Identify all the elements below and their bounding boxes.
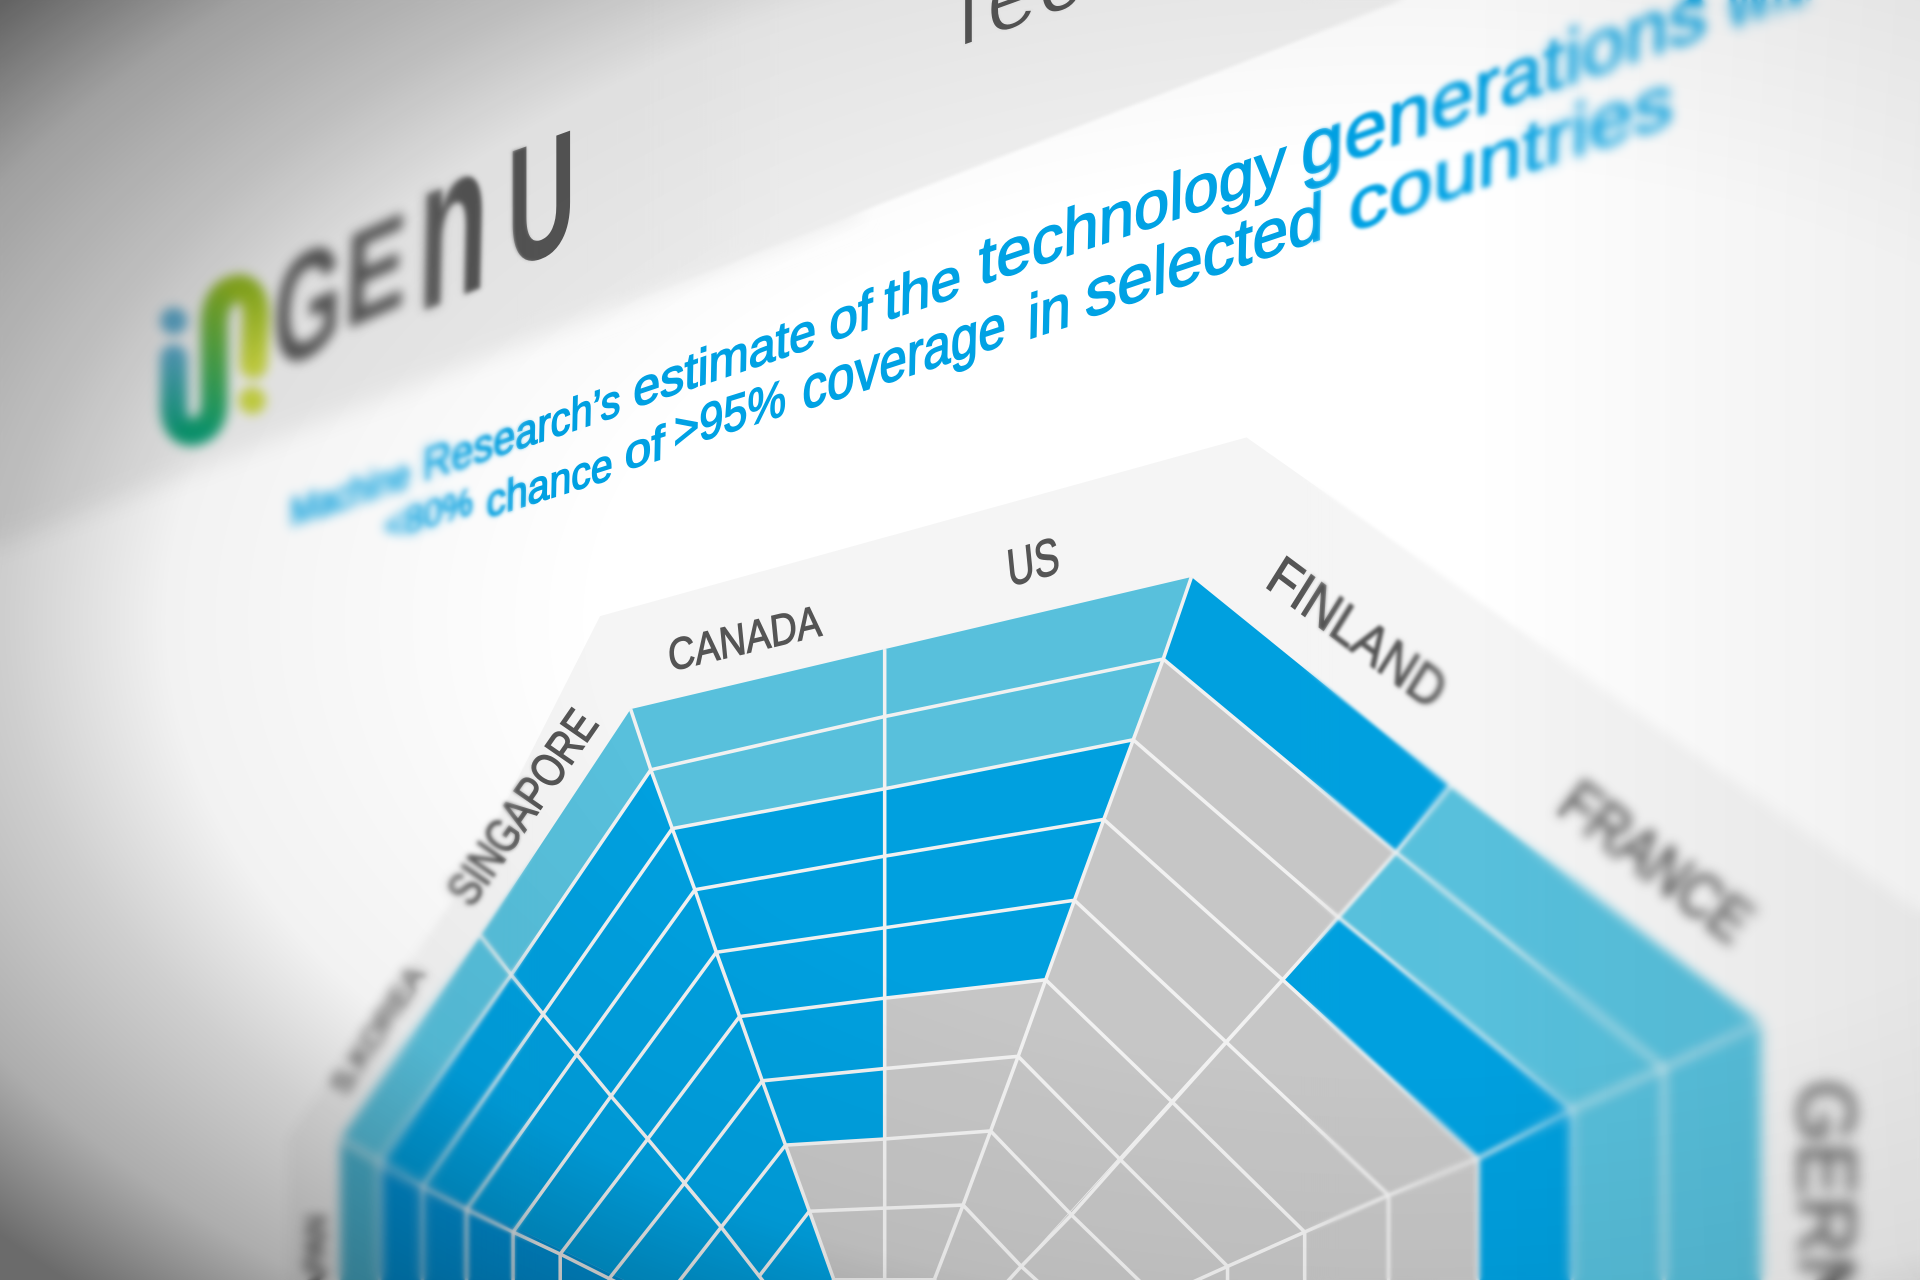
sector: Finland — [906, 577, 1450, 1280]
sector: France — [924, 786, 1761, 1280]
sector: left lower country — [340, 1139, 827, 1280]
subtitle line 1: technology — [978, 123, 1287, 300]
sector: Germany — [955, 1023, 1761, 1280]
subtitle line 2: >95% — [673, 367, 787, 461]
subtitle line 2: in — [1027, 269, 1072, 353]
subtitle line 2: chance — [486, 438, 613, 528]
subtitle line 2 — [384, 57, 1674, 549]
sector: Singapore — [481, 709, 860, 1280]
subtitle line 1: the — [884, 244, 962, 334]
label: South Korea: S.KOREA — [323, 960, 432, 1100]
logo wordmark — [271, 86, 576, 406]
label: France: FRANCE — [1545, 767, 1766, 957]
sector: Canada — [631, 649, 885, 1280]
subtitle line 2: of — [624, 416, 666, 481]
country labels — [300, 525, 1871, 1280]
label: Singapore: SINGAPORE — [437, 700, 609, 915]
subtitle line 2: selected — [1085, 178, 1325, 334]
subtitle line 1: estimate — [633, 300, 817, 419]
subtitle line 1: Research’s — [422, 373, 621, 491]
subtitle line 1: Machine — [290, 449, 411, 536]
logo wordmark: E — [342, 182, 409, 360]
radar chart — [340, 577, 1761, 1280]
icon: serpentine logo mark — [160, 288, 266, 432]
subtitle line 2: coverage — [802, 290, 1007, 423]
label: Canada: CANADA — [666, 596, 824, 681]
logo: Ingenu — [160, 86, 576, 432]
label: Finland: FINLAND — [1258, 544, 1458, 721]
subtitle line 1 — [290, 0, 1838, 536]
logo wordmark: n — [415, 86, 492, 360]
subtitle line 1: of — [829, 277, 874, 354]
logo wordmark: G — [271, 204, 345, 406]
sector: South Korea — [340, 936, 833, 1280]
label: US: US — [1004, 525, 1062, 598]
radar chart label band — [288, 437, 1920, 1280]
subtitle line 2: <80% — [384, 481, 473, 549]
sector: US — [885, 577, 1191, 1280]
subtitle line 2: countries — [1348, 57, 1674, 249]
radar ring grid lines — [340, 577, 1761, 1280]
logo wordmark: U — [507, 92, 576, 306]
